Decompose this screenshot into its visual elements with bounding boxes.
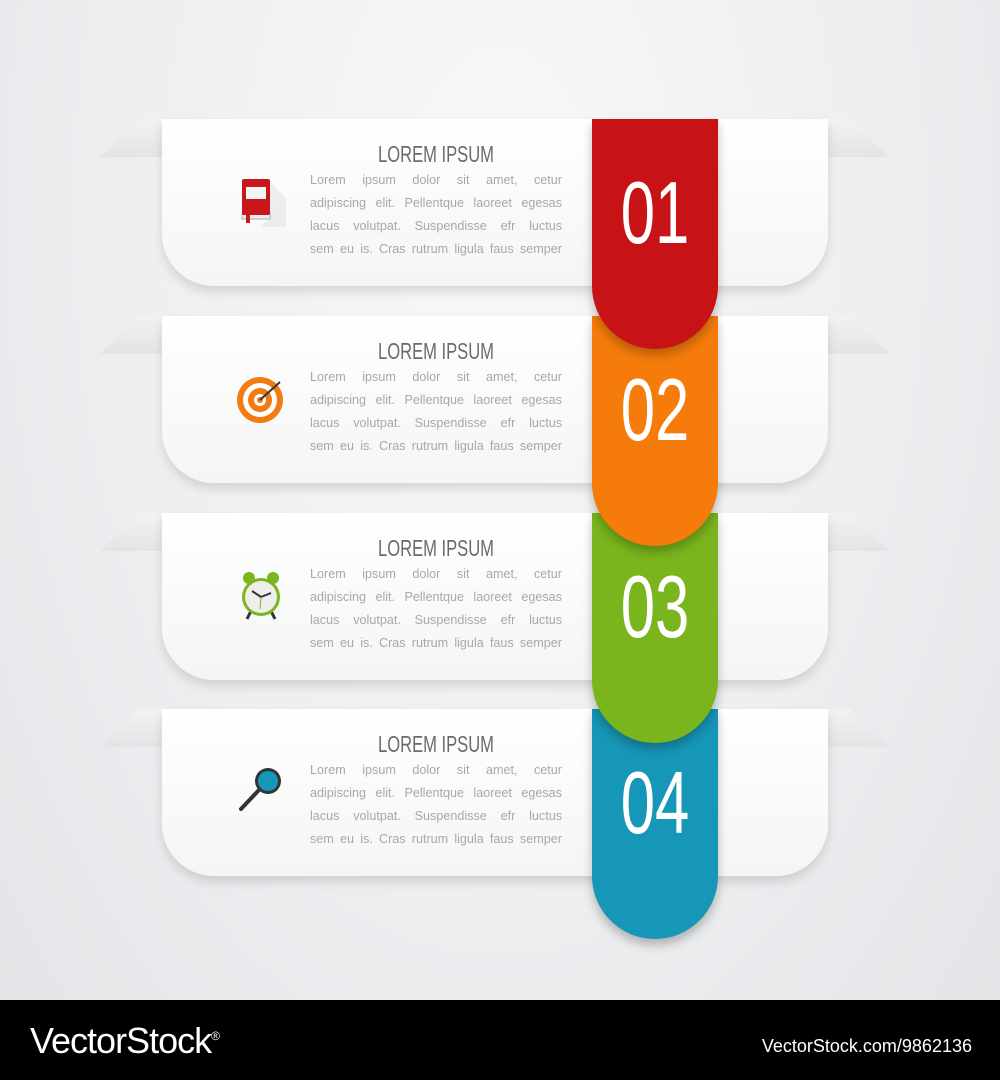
text 2: volutpat. [353, 416, 401, 430]
text 4: Pellentque [404, 786, 464, 800]
tab 04 [592, 709, 718, 939]
text 4 [310, 763, 562, 846]
text 4: ligula [454, 832, 484, 846]
text 3: faus [490, 636, 514, 650]
text 1: semper [520, 242, 562, 256]
tab 03: 03 [621, 557, 689, 656]
text 3: rutrum [412, 636, 448, 650]
text 2: semper [520, 439, 562, 453]
tab 01 [592, 119, 718, 349]
text 3: Lorem [310, 567, 346, 581]
row 3 [101, 513, 890, 689]
text 1: faus [490, 242, 514, 256]
text 1: sit [457, 173, 469, 187]
text 1: ligula [454, 242, 484, 256]
text 2: Cras [379, 439, 406, 453]
text 1: Pellentque [404, 196, 464, 210]
text 1: dolor [412, 173, 440, 187]
text 4: semper [520, 832, 562, 846]
text 3: dolor [412, 567, 440, 581]
text 4: efr [501, 809, 515, 823]
icon: alarm clock [242, 572, 280, 620]
text 4: dolor [412, 763, 440, 777]
text 3: is. [360, 636, 373, 650]
heading 1: LOREM IPSUM [378, 141, 494, 167]
text 2: cetur [534, 370, 562, 384]
text 2: efr [501, 416, 515, 430]
text 1: volutpat. [353, 219, 401, 233]
tab 01: 01 [621, 163, 689, 262]
text 3: adipiscing [310, 590, 366, 604]
tab 02: 02 [621, 360, 689, 459]
brand: VectorStock® [30, 1020, 219, 1061]
text 4: elit. [375, 786, 395, 800]
tab 04: 04 [621, 753, 689, 852]
card 4 [162, 709, 828, 876]
text 2: faus [490, 439, 514, 453]
row 1 [100, 119, 890, 295]
text 1: is. [360, 242, 373, 256]
text 4: Suspendisse [415, 809, 487, 823]
text 2: sit [457, 370, 469, 384]
heading 4: LOREM IPSUM [378, 731, 494, 757]
text 1 [310, 173, 562, 256]
row 4 [153, 709, 837, 885]
icon: book [242, 179, 286, 227]
icon: magnifier [238, 768, 281, 812]
text 2: lacus [310, 416, 339, 430]
text 2: Pellentque [404, 393, 464, 407]
text 3: lacus [310, 613, 339, 627]
text 4: lacus [310, 809, 339, 823]
text 4: laoreet [473, 786, 512, 800]
text 2: ligula [454, 439, 484, 453]
text 4: volutpat. [353, 809, 401, 823]
text 1: luctus [529, 219, 562, 233]
text 3: Cras [379, 636, 406, 650]
text 3: volutpat. [353, 613, 401, 627]
text 1: adipiscing [310, 196, 366, 210]
text 2: luctus [529, 416, 562, 430]
text 3: cetur [534, 567, 562, 581]
text 4: cetur [534, 763, 562, 777]
text 4: ipsum [362, 763, 396, 777]
text 3: ligula [454, 636, 484, 650]
text 2: sem [310, 439, 334, 453]
text 3: amet, [486, 567, 517, 581]
text 2: rutrum [412, 439, 448, 453]
text 2: laoreet [473, 393, 512, 407]
text 4: eu [340, 832, 354, 846]
text 4: sit [457, 763, 469, 777]
text 1: Lorem [310, 173, 346, 187]
url: VectorStock.com/9862136 [762, 1036, 972, 1056]
text 3 [310, 567, 562, 650]
card 3 [162, 513, 828, 680]
text 1: cetur [534, 173, 562, 187]
text 1: Cras [379, 242, 406, 256]
text 3: ipsum [362, 567, 396, 581]
text 4: luctus [529, 809, 562, 823]
text 2: is. [360, 439, 373, 453]
text 1: eu [340, 242, 354, 256]
tab 02 [592, 316, 718, 546]
text 1: egesas [521, 196, 562, 210]
text 2: eu [340, 439, 354, 453]
text 3: laoreet [473, 590, 512, 604]
icon: target [237, 377, 283, 423]
text 4: Lorem [310, 763, 346, 777]
heading 2: LOREM IPSUM [378, 338, 494, 364]
text 1: efr [501, 219, 515, 233]
text 1: ipsum [362, 173, 396, 187]
text 4: faus [490, 832, 514, 846]
text 2: adipiscing [310, 393, 366, 407]
text 3: Suspendisse [415, 613, 487, 627]
text 1: Suspendisse [415, 219, 487, 233]
text 1: amet, [486, 173, 517, 187]
text 4: amet, [486, 763, 517, 777]
text 2: amet, [486, 370, 517, 384]
text 4: sem [310, 832, 334, 846]
text 3: elit. [375, 590, 395, 604]
text 3: Pellentque [404, 590, 464, 604]
text 4: Cras [379, 832, 406, 846]
text 3: semper [520, 636, 562, 650]
card 2 [162, 316, 828, 483]
text 2: dolor [412, 370, 440, 384]
text 1: rutrum [412, 242, 448, 256]
text 3: sem [310, 636, 334, 650]
text 3: eu [340, 636, 354, 650]
text 3: sit [457, 567, 469, 581]
text 3: efr [501, 613, 515, 627]
text 2: Suspendisse [415, 416, 487, 430]
text 4: egesas [521, 786, 562, 800]
text 3: luctus [529, 613, 562, 627]
text 3: egesas [521, 590, 562, 604]
footer [0, 1000, 1000, 1080]
row 2 [100, 316, 890, 492]
text 1: laoreet [473, 196, 512, 210]
text 4: rutrum [412, 832, 448, 846]
text 1: sem [310, 242, 334, 256]
text 2: Lorem [310, 370, 346, 384]
text 1: elit. [375, 196, 395, 210]
card 1 [162, 119, 828, 286]
heading 3: LOREM IPSUM [378, 535, 494, 561]
tab 03 [592, 513, 718, 743]
text 2 [310, 370, 562, 453]
text 2: egesas [521, 393, 562, 407]
text 4: is. [360, 832, 373, 846]
text 2: elit. [375, 393, 395, 407]
text 1: lacus [310, 219, 339, 233]
text 2: ipsum [362, 370, 396, 384]
text 4: adipiscing [310, 786, 366, 800]
